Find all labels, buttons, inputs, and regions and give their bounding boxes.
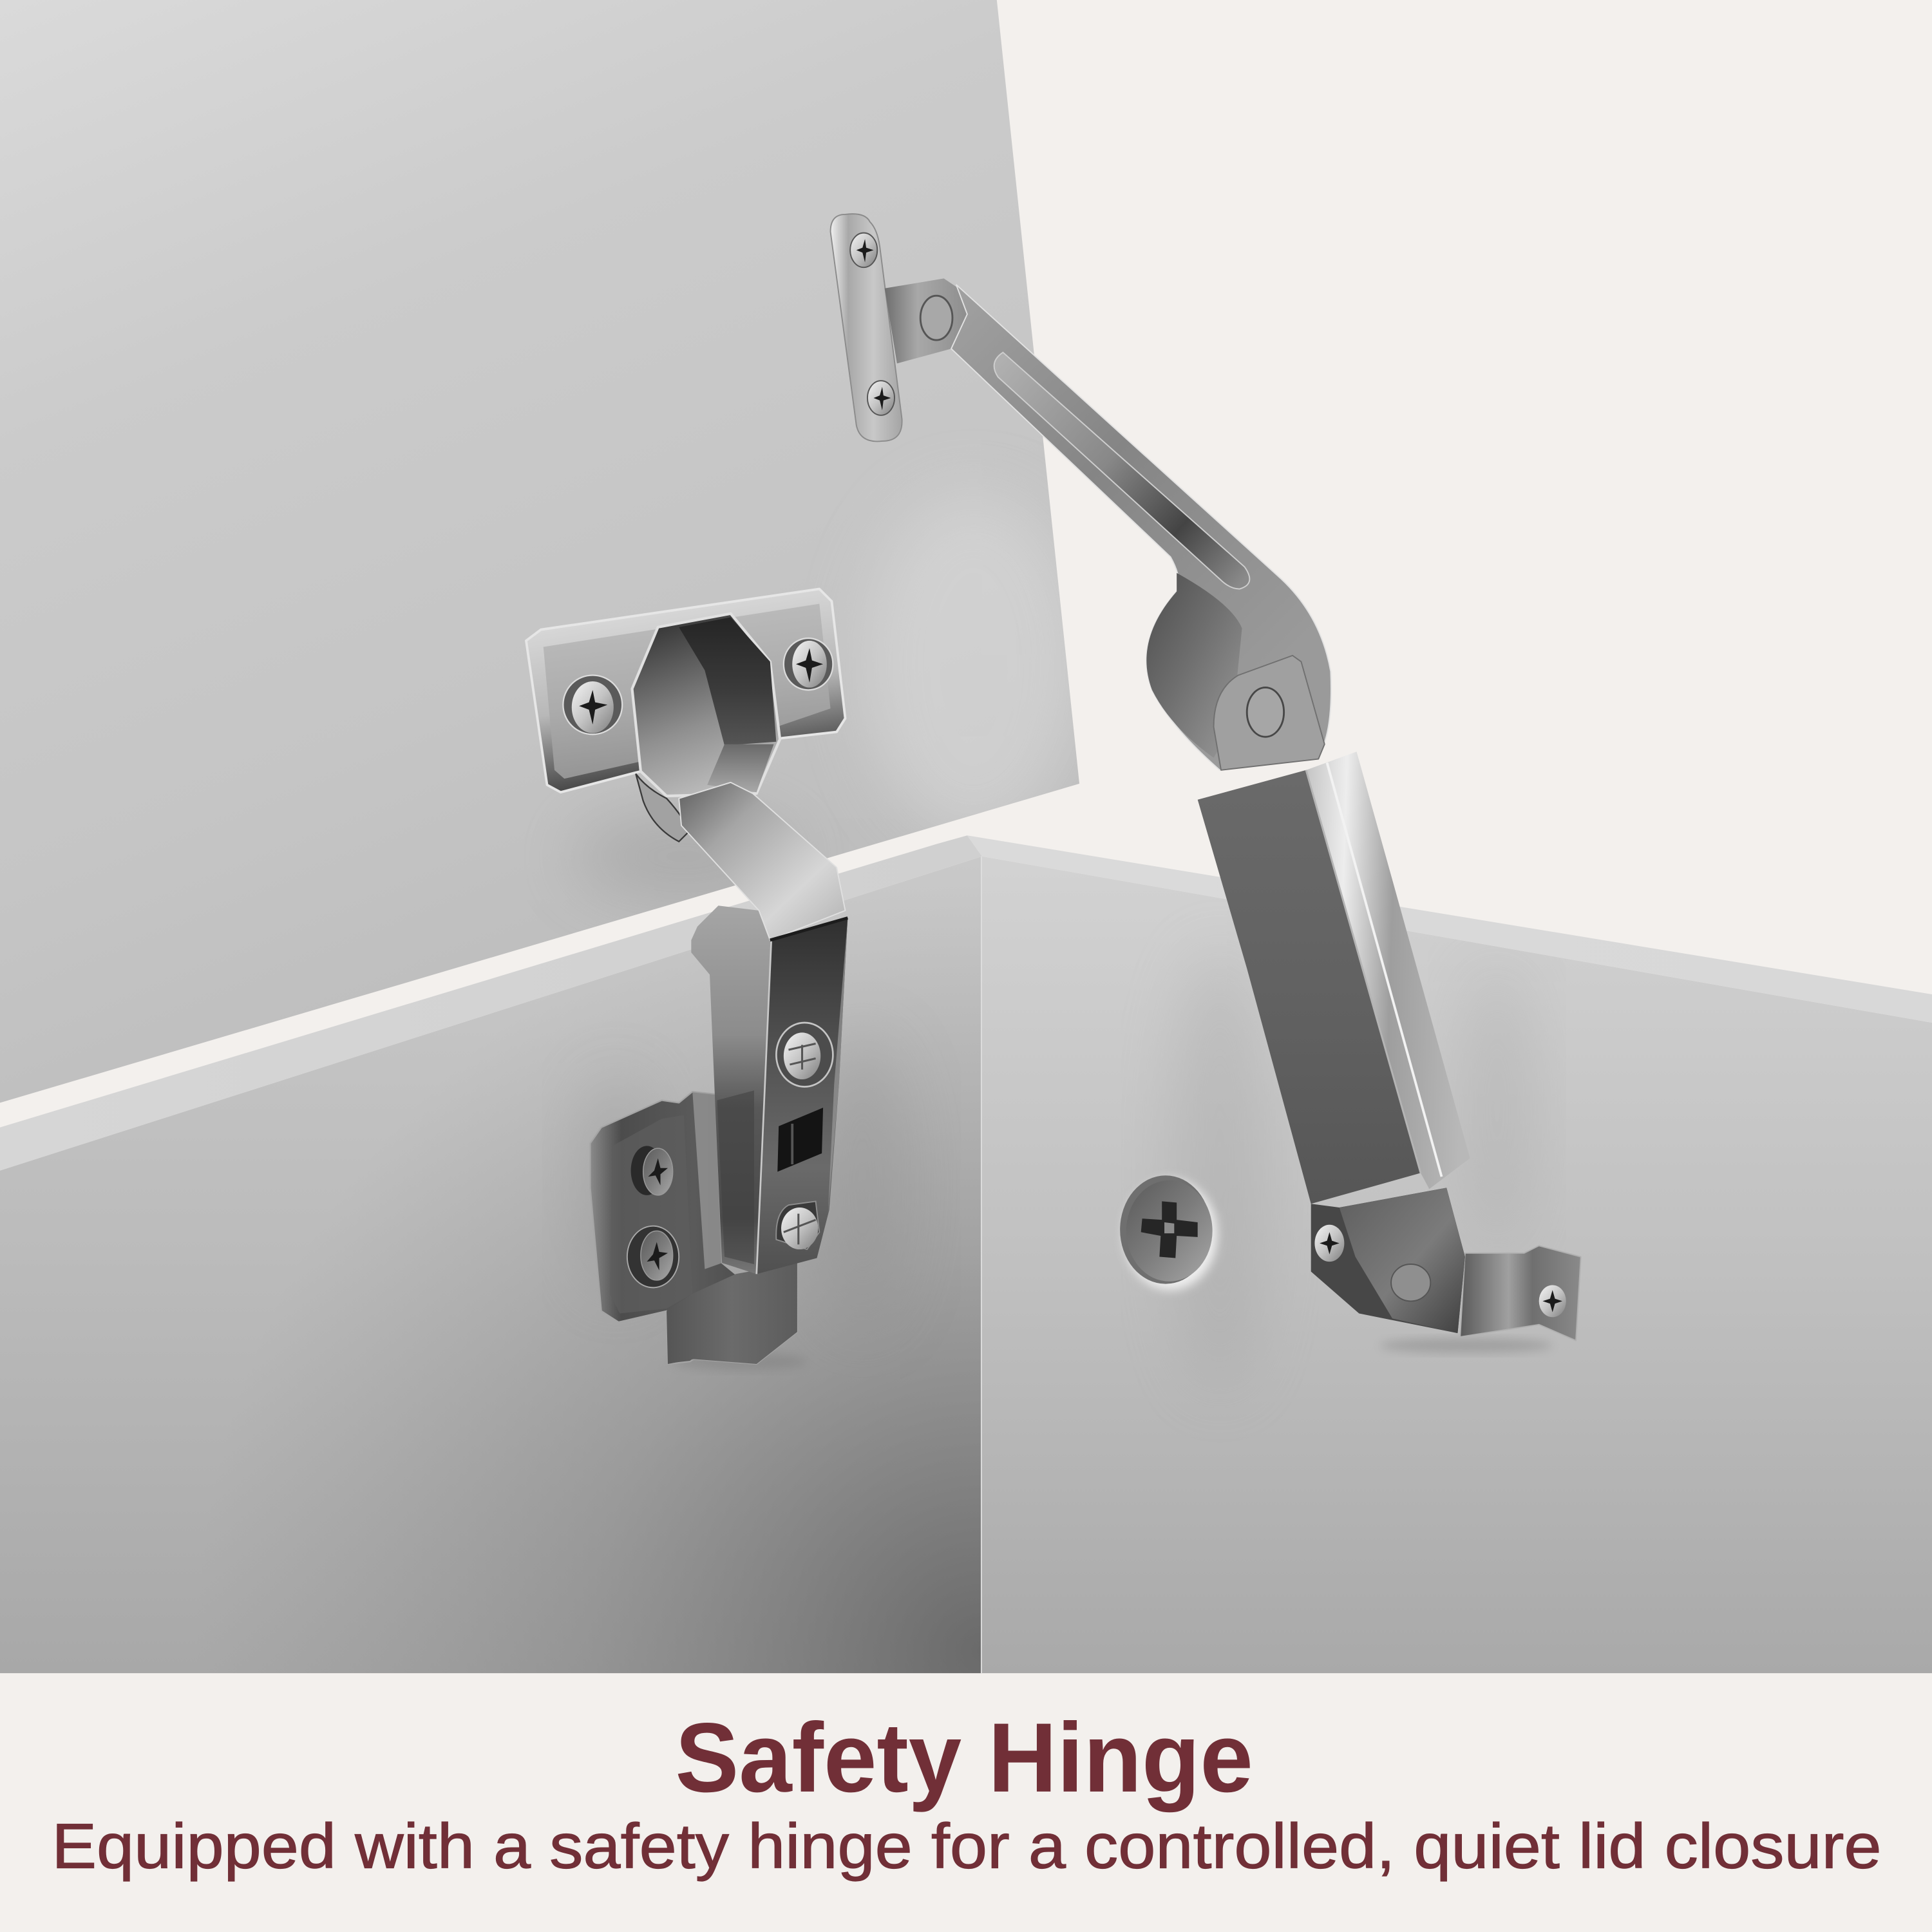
panel: caption band [0, 1673, 1932, 1932]
hinge base plate [590, 1092, 797, 1364]
stay link plate [1214, 656, 1325, 770]
subheading: Equipped with a safety hinge for a controlled, quiet lid closure [52, 1811, 1882, 1882]
stay lower mount [1311, 1188, 1581, 1341]
panel: open lid [0, 0, 1084, 1103]
stay damper tube [1198, 752, 1470, 1204]
stay long arm [951, 285, 1331, 770]
hinge strap arm [636, 774, 848, 940]
panel: box right inner wall [967, 835, 1932, 1673]
panel: box left inner wall [0, 835, 982, 1673]
icon: lid stay hinge (right) [831, 214, 1581, 1353]
icon: soft-close hinge (left) [526, 589, 848, 1370]
stay bracket on lid [831, 214, 967, 441]
hinge cover [691, 905, 772, 1274]
hinge body [757, 918, 848, 1274]
icon: large wall screw [1120, 1175, 1217, 1290]
cup mounting plate [526, 589, 845, 796]
heading: Safety Hinge [675, 1703, 1253, 1813]
